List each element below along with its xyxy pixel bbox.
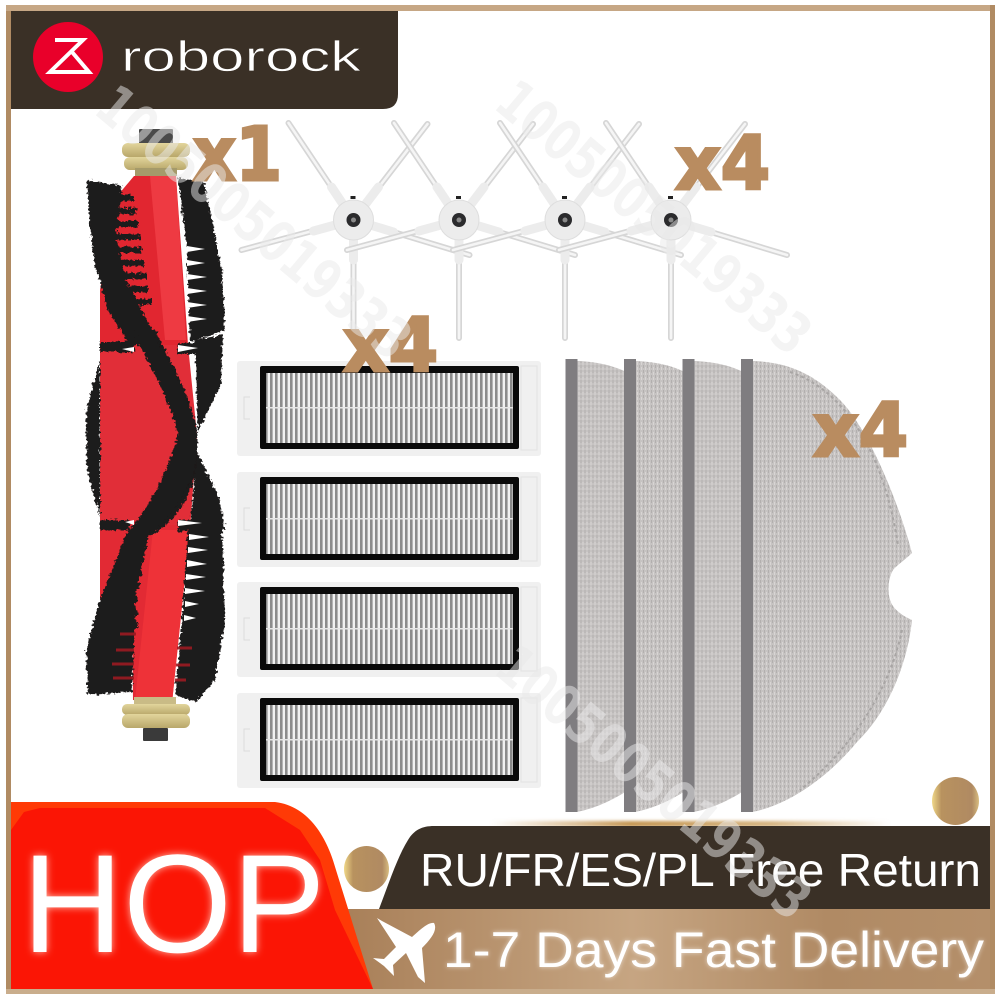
brand name: roborock	[121, 33, 362, 81]
top left bristle teeth	[114, 195, 152, 305]
side brush 4	[559, 123, 787, 338]
roller end cap top	[122, 129, 190, 176]
side brush 1	[242, 123, 470, 338]
red core	[100, 176, 197, 703]
delivery text: 1-7 Days Fast Delivery	[443, 922, 984, 978]
middle right bristles	[195, 335, 223, 432]
main brush roller	[86, 129, 225, 741]
banner: fast delivery	[340, 909, 990, 989]
quantity label: filters x4: x4	[343, 303, 438, 389]
side brush 3	[453, 123, 681, 338]
filter 4	[237, 693, 541, 788]
black bristles	[86, 178, 225, 702]
filter 1	[237, 361, 541, 456]
banner: free return	[379, 826, 990, 909]
free return text: RU/FR/ES/PL Free Return	[420, 844, 981, 896]
top right bristle band	[178, 178, 225, 342]
red teeth between bristles	[112, 634, 192, 680]
side brush 2	[347, 123, 575, 338]
watermark 1: 1005005019333	[83, 73, 424, 373]
mop pads	[566, 359, 912, 812]
mop pad 4	[741, 359, 912, 812]
middle left bristles	[86, 360, 100, 517]
bottom right bristle band	[175, 528, 225, 702]
bottom left bristle teeth	[116, 570, 142, 628]
mop pad 1	[566, 359, 736, 812]
bristle gaps	[122, 246, 209, 621]
mop pad 2	[624, 359, 795, 812]
divider bristles	[100, 342, 222, 531]
HEPA filters	[237, 361, 541, 788]
HOP text: HOP	[22, 825, 325, 982]
gold glow above return bar	[490, 821, 890, 827]
top left bristle band	[87, 180, 160, 345]
quantity label: x1: x1	[193, 112, 282, 198]
filter 3	[237, 582, 541, 677]
side brushes	[242, 123, 787, 338]
brand header	[11, 11, 398, 109]
watermark 2: 1005005019333	[483, 68, 824, 368]
mop stitching	[790, 372, 902, 790]
quantity label: side brushes x4: x4	[675, 121, 770, 207]
icon: airplane	[373, 918, 435, 983]
red HOP badge	[11, 802, 373, 989]
filter 2	[237, 472, 541, 567]
mop pad 3	[682, 359, 854, 812]
gold circle left	[344, 846, 389, 892]
roller end cap bottom	[122, 697, 190, 741]
central helix	[128, 330, 198, 535]
quantity label: mops x4: x4	[813, 388, 908, 474]
logo: red circle	[33, 22, 103, 92]
watermark 3: 1005005019333	[483, 633, 824, 933]
gold circle right	[932, 777, 979, 825]
bottom left bristle band	[86, 530, 150, 695]
